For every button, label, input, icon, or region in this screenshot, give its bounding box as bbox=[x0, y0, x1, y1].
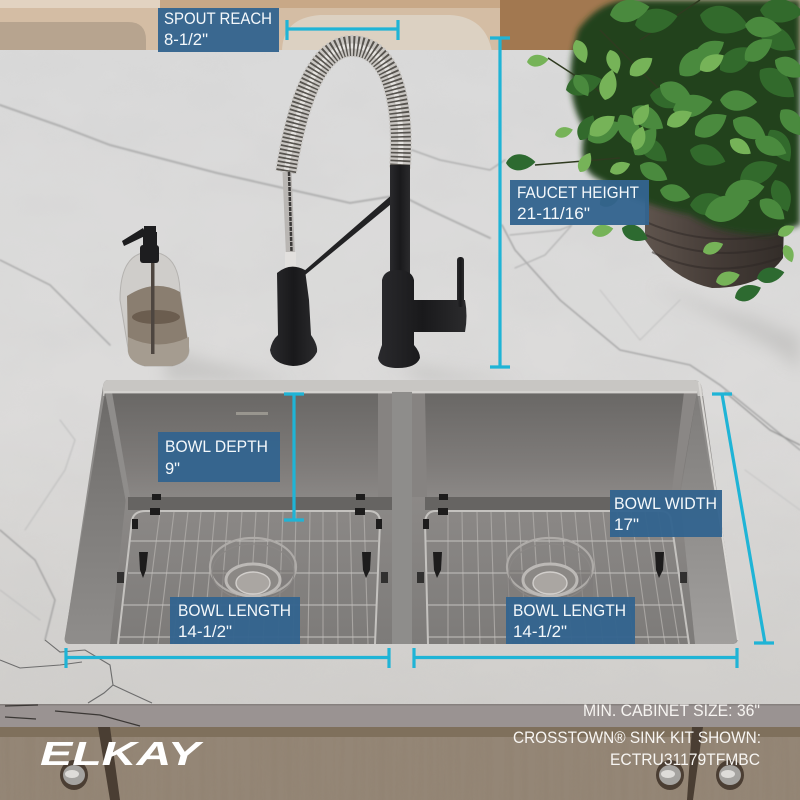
left bottom grid bbox=[118, 511, 380, 644]
sprayer head bbox=[270, 267, 317, 366]
arrow: faucet height bracket bbox=[490, 38, 510, 367]
foliage mass bbox=[570, 0, 800, 235]
label: spout reach bbox=[158, 8, 279, 52]
dimension: bowl depth bbox=[158, 394, 304, 520]
label: spout reach: SPOUT REACH bbox=[164, 10, 272, 28]
dimension: spout reach bbox=[158, 8, 398, 52]
arrow: right bowl length bracket bbox=[414, 648, 737, 668]
label: right bowl length: 14-1/2" bbox=[513, 623, 567, 641]
label: left bowl length: BOWL LENGTH bbox=[178, 602, 291, 620]
background: room behind counter bbox=[0, 0, 800, 52]
sink: double bowl undermount bbox=[65, 380, 738, 644]
footer spec text: ECTRU31179TFMBC bbox=[610, 750, 760, 769]
marble veins bbox=[0, 105, 800, 640]
faucet coil spring bbox=[286, 46, 401, 172]
label: faucet height: 21-11/16" bbox=[517, 205, 590, 223]
label: bowl depth: BOWL DEPTH bbox=[165, 438, 268, 456]
faucet body and handle bbox=[378, 165, 466, 368]
label: bowl width bbox=[610, 490, 722, 537]
leaves mid bbox=[570, 0, 800, 226]
shadows on counter bbox=[165, 285, 800, 382]
footer spec text: MIN. CABINET SIZE: 36" bbox=[583, 701, 760, 720]
cabinet knobs bbox=[60, 760, 744, 790]
sprayer hose bbox=[287, 172, 291, 268]
label: faucet height bbox=[510, 180, 649, 225]
label: bowl width: BOWL WIDTH bbox=[614, 495, 717, 513]
left bowl bbox=[65, 391, 392, 644]
dimension: bowl width bbox=[610, 394, 774, 643]
sprayer arm bbox=[303, 193, 396, 275]
faucet bbox=[270, 46, 466, 368]
label: left bowl length: 14-1/2" bbox=[178, 623, 232, 641]
label: left bowl length bbox=[170, 597, 300, 644]
label: bowl width: 17" bbox=[614, 516, 639, 534]
stems bbox=[535, 0, 700, 165]
arrow: bowl depth bracket bbox=[284, 394, 304, 520]
label: bowl depth: 9" bbox=[165, 460, 180, 478]
soap dispenser bbox=[120, 226, 189, 366]
label: right bowl length: BOWL LENGTH bbox=[513, 602, 626, 620]
dimension: left bowl length bbox=[66, 597, 389, 668]
dimension: right bowl length bbox=[414, 597, 737, 668]
trailing leaves dark bbox=[506, 154, 786, 305]
arrow: left bowl length bracket bbox=[66, 648, 389, 668]
arrow: spout reach bracket bbox=[287, 20, 398, 40]
leaves light bbox=[526, 37, 797, 288]
footer spec text bbox=[513, 701, 761, 769]
label: spout reach: 8-1/2" bbox=[164, 31, 208, 49]
plant pot bbox=[645, 190, 785, 288]
right bowl strainer bbox=[507, 538, 593, 606]
right bowl bbox=[412, 382, 738, 644]
sink rim and divider bbox=[65, 380, 738, 644]
label: right bowl length bbox=[506, 597, 635, 644]
left bowl strainer bbox=[210, 538, 296, 606]
leaves dark bbox=[563, 0, 800, 215]
label: bowl depth bbox=[158, 432, 280, 482]
dimension: faucet height bbox=[490, 38, 649, 367]
counter edge and cabinet bbox=[0, 704, 800, 800]
grid clips and bumpers bbox=[117, 494, 687, 583]
logo: ELKAY: ELKAY bbox=[40, 735, 204, 772]
right bottom grid bbox=[425, 511, 689, 644]
label: faucet height: FAUCET HEIGHT bbox=[517, 184, 639, 202]
arrow: bowl width bracket bbox=[712, 394, 774, 643]
potted plant bbox=[506, 0, 800, 305]
footer spec text: CROSSTOWN® SINK KIT SHOWN: bbox=[513, 728, 761, 747]
